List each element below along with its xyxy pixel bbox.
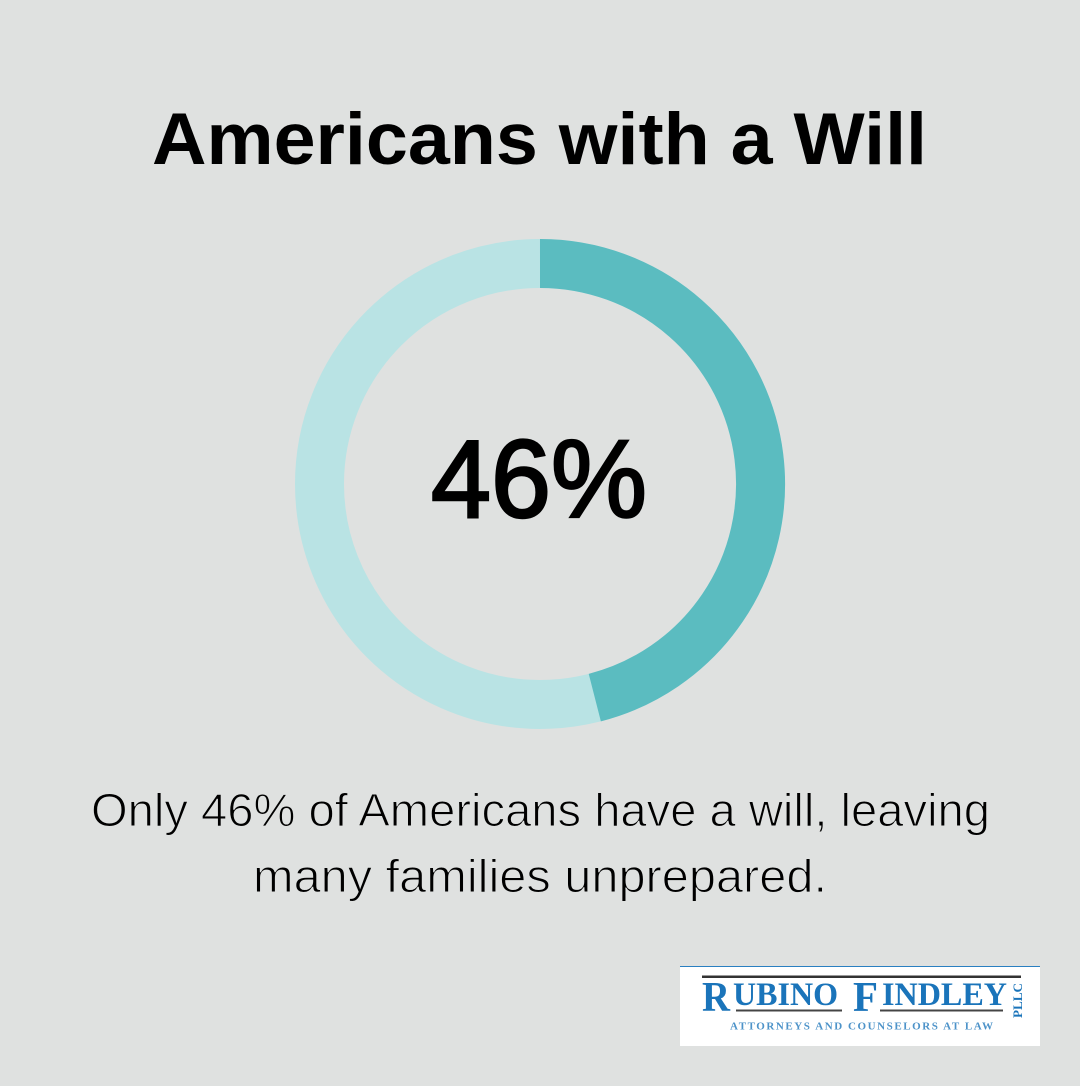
logo: Rubino Findley PLLC: [680, 966, 1040, 1046]
logo tagline: ATTORNEYS AND COUNSELORS AT LAW: [730, 1020, 993, 1032]
donut track: remaining 54%: [320, 264, 760, 704]
description line 1: Only 46% of Americans have a will, leaving: [91, 784, 990, 836]
logo wordmark: F: [853, 975, 878, 1021]
logo wordmark: INDLEY: [882, 977, 1007, 1013]
logo wordmark: R: [702, 975, 731, 1021]
title: Americans with a Will: [152, 99, 927, 180]
logo wordmark: [702, 975, 1025, 1021]
donut segment: 46%: [540, 264, 761, 698]
description text: [91, 784, 990, 902]
logo wordmark: PLLC: [1010, 983, 1025, 1018]
logo wordmark: UBINO: [733, 977, 838, 1013]
central percentage: 46%: [431, 418, 647, 541]
donut chart: 46%: [320, 264, 761, 704]
description line 2: many families unprepared.: [253, 850, 827, 902]
